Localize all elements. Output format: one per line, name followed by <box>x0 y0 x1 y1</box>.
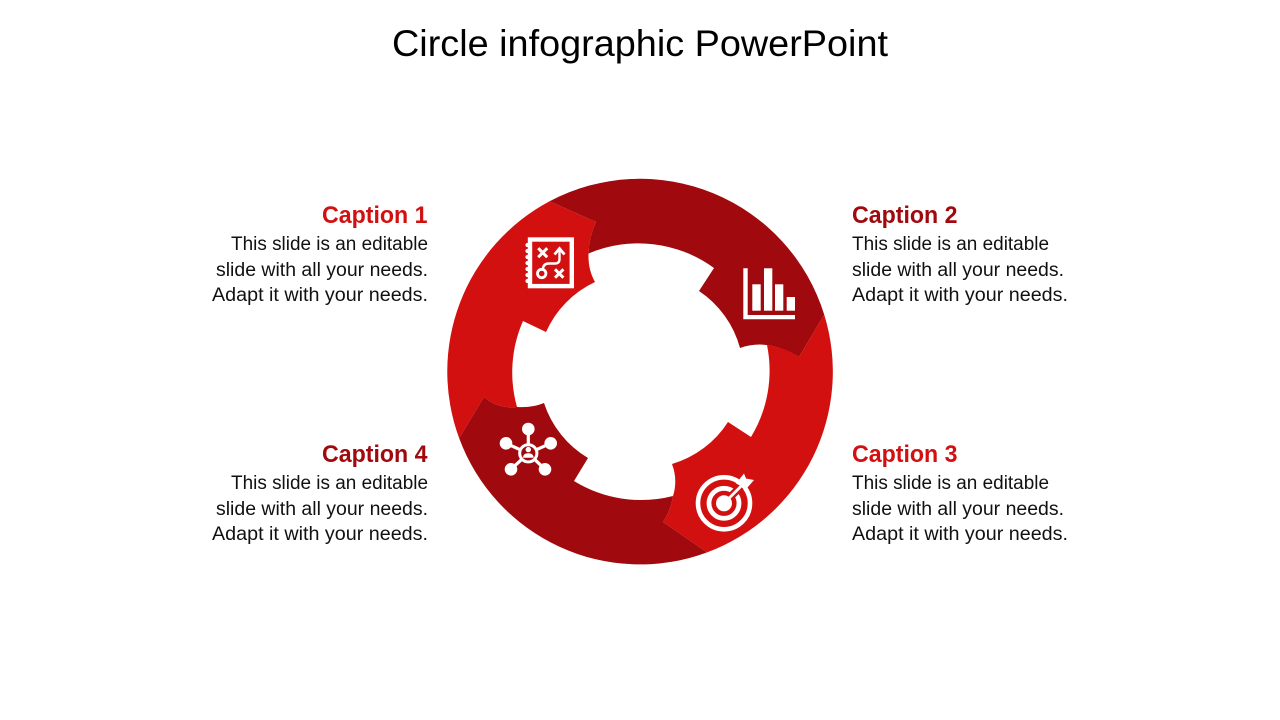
caption 1: slide with all your needs. <box>216 260 428 281</box>
icon: network with person <box>500 423 557 476</box>
segment 3: bright red <box>663 315 833 552</box>
caption 3: slide with all your needs. <box>852 499 1064 520</box>
caption 4 <box>212 441 428 545</box>
caption 4: Caption 4 <box>322 441 428 468</box>
caption 2 <box>852 202 1068 306</box>
caption 1 <box>212 202 428 306</box>
icon: target with arrow <box>698 474 754 529</box>
caption 3: Caption 3 <box>852 441 958 468</box>
caption 2: This slide is an editable <box>852 234 1049 255</box>
caption 1: Caption 1 <box>322 202 428 229</box>
caption 4: This slide is an editable <box>231 473 428 494</box>
caption 2: slide with all your needs. <box>852 260 1064 281</box>
caption 3 <box>852 441 1068 545</box>
caption 2: Adapt it with your needs. <box>852 285 1068 306</box>
caption 3: This slide is an editable <box>852 473 1049 494</box>
caption 4: Adapt it with your needs. <box>212 524 428 545</box>
caption 4: slide with all your needs. <box>216 499 428 520</box>
icon: bar chart <box>743 268 795 319</box>
caption 2: Caption 2 <box>852 202 958 229</box>
segment 1: bright red <box>447 201 596 438</box>
icon: strategy notebook <box>525 240 572 286</box>
caption 1: Adapt it with your needs. <box>212 285 428 306</box>
title: Circle infographic PowerPoint <box>392 23 889 64</box>
caption 1: This slide is an editable <box>231 234 428 255</box>
caption 3: Adapt it with your needs. <box>852 524 1068 545</box>
segment 2: dark red <box>550 179 824 357</box>
segment 4: dark red <box>459 397 707 564</box>
circular arrow diagram <box>447 179 833 564</box>
